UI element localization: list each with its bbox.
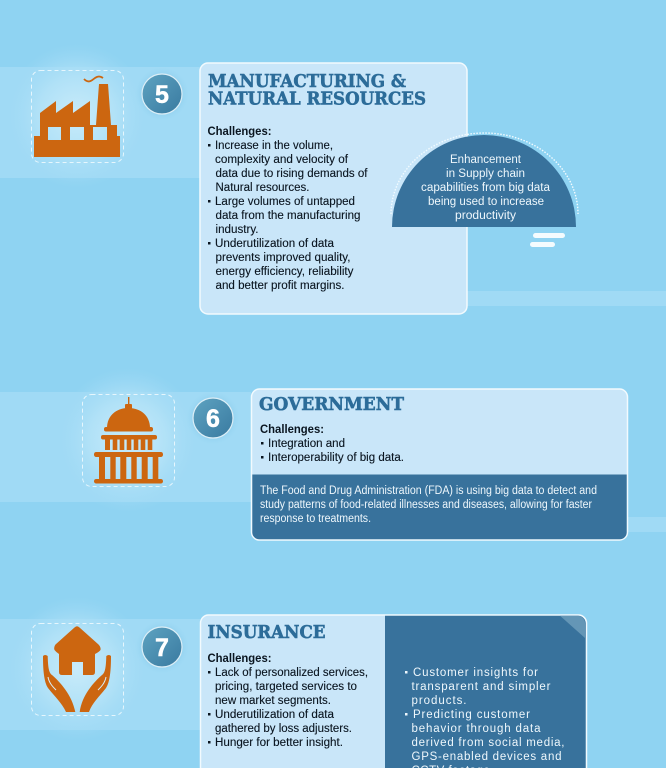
number badge 7 <box>135 620 189 674</box>
callout: supply chain semicircle: capabilities from big data <box>421 182 551 194</box>
insurance use cases: derived from social media, <box>412 737 564 749</box>
insurance use cases: GPS-enabled devices and <box>412 751 562 763</box>
insurance use cases: products. <box>412 695 466 707</box>
challenges list: Challenges: <box>208 124 272 138</box>
heading: INSURANCE <box>208 623 326 643</box>
challenges list: new market segments. <box>215 695 331 707</box>
challenges list: prevents improved quality, <box>216 252 350 264</box>
heading: NATURAL RESOURCES <box>208 90 426 110</box>
number badge 7: 7 <box>155 634 169 662</box>
heading: GOVERNMENT <box>259 395 404 415</box>
challenges list: data due to rising demands of <box>216 168 368 180</box>
insurance use cases: transparent and simpler <box>412 681 551 693</box>
insurance use cases: behavior through data <box>412 723 541 735</box>
challenges list: Challenges: <box>208 651 272 665</box>
challenges list: complexity and velocity of <box>215 154 349 166</box>
challenges list: pricing, targeted services to <box>215 681 357 693</box>
callout: supply chain semicircle: Enhancement <box>450 154 522 166</box>
number badge 6 <box>186 391 240 445</box>
callout: supply chain semicircle: productivity <box>455 210 516 222</box>
FDA use case: The Food and Drug Administration (FDA) is using big data to detect and <box>260 485 597 497</box>
heading: MANUFACTURING & <box>208 72 406 92</box>
section 6: government <box>0 368 666 540</box>
panel: government challenges <box>252 389 628 540</box>
challenges list: Challenges: <box>260 422 324 436</box>
number badge 5: 5 <box>155 81 169 109</box>
callout: supply chain semicircle <box>391 133 578 247</box>
number badge 6: 6 <box>206 405 220 433</box>
callout: supply chain semicircle: in Supply chain <box>446 168 525 180</box>
challenges list: Hunger for better insight. <box>215 737 343 749</box>
panel: insurance challenges <box>200 615 586 768</box>
callout: supply chain semicircle: being used to increase <box>428 196 544 208</box>
challenges list: data from the manufacturing <box>216 210 360 222</box>
challenges list: and better profit margins. <box>216 280 344 292</box>
FDA use case <box>252 474 627 539</box>
challenges list: Underutilization of data <box>215 709 335 721</box>
challenges list <box>208 651 368 749</box>
number badge 5 <box>135 67 189 121</box>
icon: capitol building <box>56 368 200 512</box>
challenges list: Increase in the volume, <box>215 140 333 152</box>
challenges list: Interoperability of big data. <box>268 452 404 464</box>
challenges list: Integration and <box>268 438 345 450</box>
challenges list: energy efficiency, reliability <box>216 266 354 278</box>
section 7: insurance <box>0 597 586 768</box>
heading <box>208 72 426 110</box>
challenges list: Lack of personalized services, <box>215 667 368 679</box>
icon: house in hands <box>5 597 149 741</box>
FDA use case: response to treatments. <box>260 513 371 525</box>
FDA use case: study patterns of food-related illnesses and diseases, allowing for faster <box>260 499 592 511</box>
challenges list <box>208 124 368 292</box>
challenges list: Underutilization of data <box>215 238 335 250</box>
challenges list <box>260 422 404 464</box>
section 5: manufacturing and natural resources <box>0 44 666 314</box>
insurance use cases: Predicting customer <box>413 709 530 721</box>
challenges list: gathered by loss adjusters. <box>215 723 352 735</box>
icon: factory <box>5 44 149 188</box>
insurance use cases: Customer insights for <box>413 667 538 679</box>
panel: manufacturing challenges <box>200 63 467 314</box>
challenges list: Large volumes of untapped <box>215 196 355 208</box>
insurance use cases <box>385 616 586 768</box>
challenges list: Natural resources. <box>216 182 310 194</box>
challenges list: industry. <box>216 224 258 236</box>
